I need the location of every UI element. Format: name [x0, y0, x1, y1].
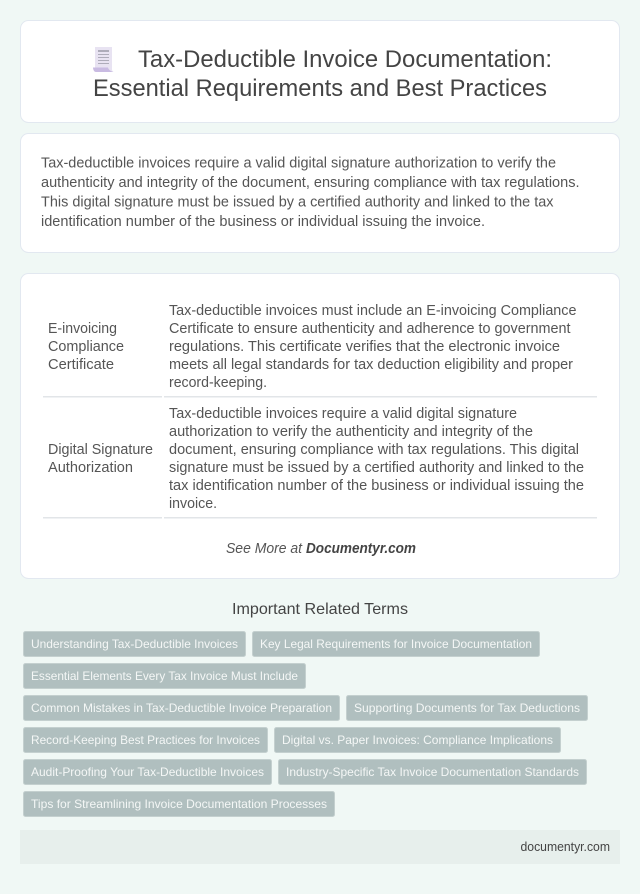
tag [346, 696, 588, 720]
footer: documentyr.com [520, 840, 610, 854]
table row: e-invoicing compliance certificate [43, 303, 597, 398]
table row: e-invoicing compliance certificate: Compliance [48, 339, 124, 355]
tag [274, 728, 560, 752]
table row: e-invoicing compliance certificate: record-keeping. [169, 375, 267, 391]
tag [24, 792, 334, 816]
icon: receipt document [93, 47, 114, 72]
panel: requirements table [20, 274, 620, 578]
tag: Digital vs. Paper Invoices: Compliance Implications [282, 733, 553, 747]
tag: Understanding Tax-Deductible Invoices [31, 637, 238, 651]
tag [24, 632, 246, 656]
tag [24, 760, 272, 784]
tag: Key Legal Requirements for Invoice Documentation [260, 637, 532, 651]
table row: digital signature authorization: signature must be issued by a certified authority and linked to the [169, 460, 584, 476]
table row: e-invoicing compliance certificate: Certificate to ensure authenticity and adherence to government [169, 321, 570, 337]
tag: Supporting Documents for Tax Deductions [354, 701, 580, 715]
table row: digital signature authorization: document, ensuring compliance with tax regulations. This digital [169, 442, 579, 458]
tag [24, 664, 306, 688]
panel: title card [20, 20, 620, 122]
table row: digital signature authorization: invoice. [169, 496, 217, 512]
table row: digital signature authorization: authorization to verify the authenticity and integrity of the [169, 424, 533, 440]
see more link: Documentyr.com [306, 541, 416, 557]
tag [24, 696, 340, 720]
table row: e-invoicing compliance certificate: Tax-deductible invoices must include an E-invoicing Compliance [169, 303, 576, 319]
panel: introduction text: Tax-deductible invoices require a valid digital signature authorization to verify the [41, 156, 556, 172]
table row: digital signature authorization: Digital Signature [48, 442, 153, 458]
tag [252, 632, 540, 656]
title: Essential Requirements and Best Practices [93, 75, 547, 102]
table row: digital signature authorization: Tax-deductible invoices require a valid digital signature [169, 406, 517, 422]
tag [24, 728, 268, 752]
table row: e-invoicing compliance certificate: regulations. This certificate verifies that the electronic invoice [169, 339, 560, 355]
tag: Industry-Specific Tax Invoice Documentation Standards [286, 765, 579, 779]
panel: introduction text: This digital signature must be issued by a certified authority and linked to the tax [41, 194, 554, 210]
see more link [226, 541, 416, 557]
table row: e-invoicing compliance certificate: meets all legal standards for tax deduction eligibility and proper [169, 357, 573, 373]
table row: digital signature authorization [43, 406, 597, 518]
table row: e-invoicing compliance certificate: Certificate [48, 357, 114, 373]
table row: digital signature authorization: tax identification number of the business or individual issuing the [169, 478, 584, 494]
tag: Record-Keeping Best Practices for Invoices [31, 733, 260, 747]
heading: important related terms: Important Related Terms [232, 601, 408, 618]
table row: e-invoicing compliance certificate: E-invoicing [48, 321, 117, 337]
panel: introduction text: authenticity and integrity of the document, ensuring compliance with tax regulations. [41, 175, 580, 191]
tag: Common Mistakes in Tax-Deductible Invoice Preparation [31, 701, 332, 715]
related terms tags [24, 632, 588, 816]
tag: Tips for Streamlining Invoice Documentation Processes [31, 797, 327, 811]
title: Tax-Deductible Invoice Documentation: [138, 46, 552, 73]
see more link: See More at [226, 541, 303, 557]
tag: Audit-Proofing Your Tax-Deductible Invoices [31, 765, 264, 779]
panel: introduction text: identification number of the business or individual issuing the invoice. [41, 214, 485, 230]
tag: Essential Elements Every Tax Invoice Must Include [31, 669, 298, 683]
tag [278, 760, 586, 784]
title [93, 46, 552, 102]
footer [20, 830, 620, 864]
panel: introduction text [20, 134, 620, 252]
table row: digital signature authorization: Authorization [48, 460, 133, 476]
